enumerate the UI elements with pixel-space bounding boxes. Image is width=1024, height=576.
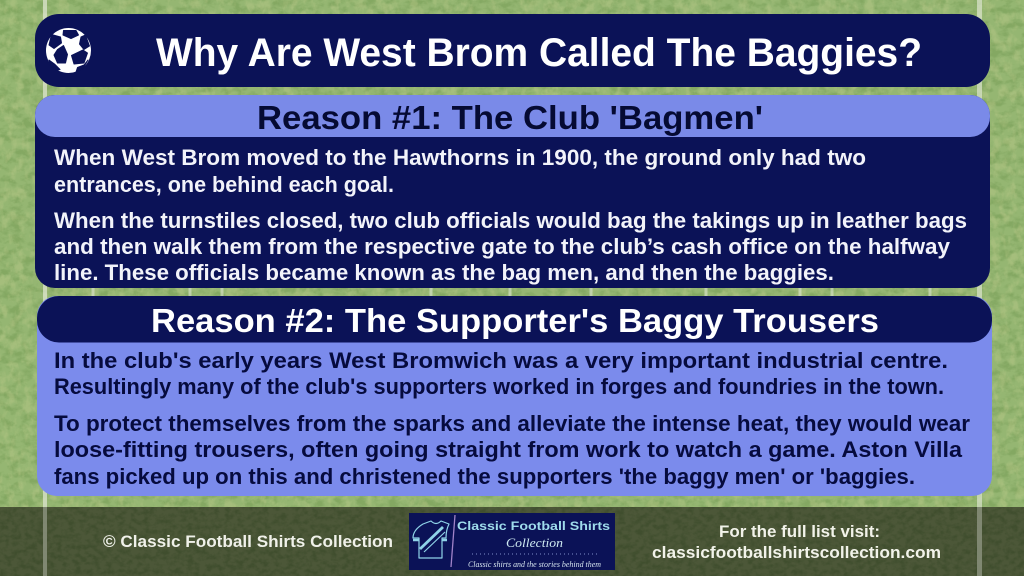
footer: copyright: © Classic Football Shirts Collection: [103, 533, 393, 551]
text block: reason 1 paragraph 1: entrances, one behind each goal.: [54, 172, 394, 197]
text block: reason 1 paragraph 1: When West Brom moved to the Hawthorns in 1900, the ground only had two: [54, 145, 866, 170]
footer: website call to action: classicfootballshirtscollection.com: [652, 544, 941, 562]
panel: reason 2: [37, 296, 992, 496]
heading: reason 2: [37, 296, 992, 342]
title bar: [35, 14, 990, 87]
icon: football: [46, 28, 91, 73]
text block: reason 2 paragraph 2: loose-fitting trousers, often going straight from work to watch a game. Aston Villa: [54, 437, 963, 462]
text block: reason 2 paragraph 2: fans picked up on this and christened the supporters 'the baggy men' or 'baggies.: [54, 464, 915, 489]
footer: website call to action: [652, 523, 941, 562]
logo: [409, 513, 615, 570]
logo subtitle: Collection: [506, 535, 563, 550]
text block: reason 2 paragraph 2: [54, 411, 970, 489]
logo tagline: Classic shirts and the stories behind them: [468, 559, 601, 569]
text block: reason 2 paragraph 1: In the club's early years West Bromwich was a very important industrial centre.: [54, 348, 948, 373]
heading: reason 1: Reason #1: The Club 'Bagmen': [257, 99, 763, 136]
heading: reason 1: [35, 95, 990, 137]
divider slash: [451, 515, 455, 567]
dotted rule: [472, 553, 600, 555]
text block: reason 2 paragraph 1: Resultingly many of the club's supporters worked in forges and foundries in the town.: [54, 374, 944, 399]
text block: reason 1 paragraph 2: [54, 208, 967, 285]
footer band: [0, 507, 1024, 576]
text block: reason 1 paragraph 2: and then walk them from the respective gate to the club’s cash office on the halfway: [54, 234, 951, 259]
text block: reason 2 paragraph 1: [54, 348, 948, 399]
text block: reason 1 paragraph 2: line. These officials became known as the bag men, and then the baggies.: [54, 260, 834, 285]
logo title: Classic Football Shirts: [457, 519, 610, 533]
panel: reason 1: [35, 95, 990, 288]
text block: reason 2 paragraph 2: To protect themselves from the sparks and alleviate the intense heat, they would wear: [54, 411, 970, 436]
icon: shirt: [413, 521, 449, 558]
title text: Why Are West Brom Called The Baggies?: [156, 31, 922, 75]
text block: reason 1 paragraph 2: When the turnstiles closed, two club officials would bag the takings up in leather bags: [54, 208, 967, 233]
footer: website call to action: For the full list visit:: [719, 523, 880, 541]
text block: reason 1 paragraph 1: [54, 145, 866, 197]
heading: reason 2: Reason #2: The Supporter's Baggy Trousers: [151, 302, 879, 339]
